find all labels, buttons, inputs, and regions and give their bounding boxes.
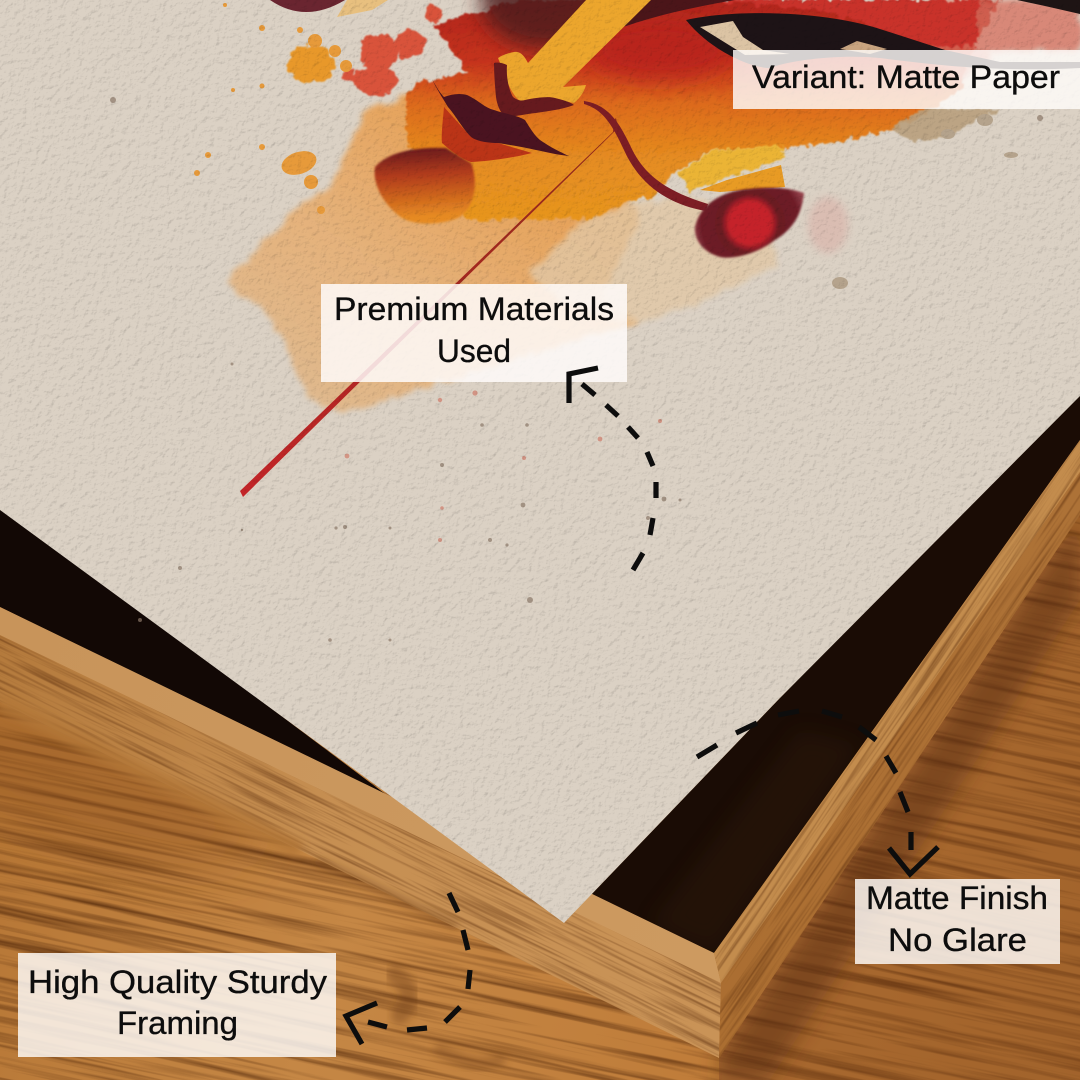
label: Matte Finish No Glare: No Glare <box>888 922 1027 958</box>
label: Premium Materials Used: Used <box>437 333 511 369</box>
label: High Quality Sturdy Framing: High Quality Sturdy <box>28 964 327 1000</box>
soft blend of frame into floor at left <box>0 702 300 850</box>
lips lower <box>442 107 532 162</box>
pink spray <box>808 197 848 253</box>
brown stain under label <box>893 108 1000 140</box>
frame top right grain <box>714 440 1080 983</box>
lips upper <box>432 79 569 156</box>
frame right side grain <box>719 472 1080 1058</box>
label: Premium Materials Used <box>321 284 627 382</box>
light beige wash patch <box>528 195 780 325</box>
paper speckles <box>110 97 1043 642</box>
watercolour artwork <box>194 0 1080 497</box>
frame top right rail <box>714 440 1080 983</box>
pale orange wash <box>225 95 640 413</box>
label: High Quality Sturdy Framing: Framing <box>117 1005 238 1041</box>
frame front left face <box>0 635 721 1058</box>
arrow: dashed curve to Matte Finish <box>697 711 938 874</box>
top right black shape <box>1017 0 1080 14</box>
maroon under fork <box>494 63 574 117</box>
top yellow wash <box>337 0 388 17</box>
top left maroon blob <box>270 0 345 12</box>
dark maroon shading <box>480 0 610 48</box>
red drop shape <box>375 148 475 224</box>
wooden frame <box>0 440 1080 1058</box>
label: Matte Finish No Glare: Matte Finish <box>866 880 1048 916</box>
eye shape <box>686 13 1080 69</box>
label: High Quality Sturdy Framing <box>18 953 336 1057</box>
pink paint flecks <box>345 390 662 542</box>
round red ornament <box>695 188 804 258</box>
dark frame interior <box>0 392 1080 953</box>
label: Premium Materials Used: Premium Materials <box>334 291 614 327</box>
frame top left rail <box>0 607 721 983</box>
left floor darkening <box>0 685 269 895</box>
red haze at right of yellow bar <box>590 20 730 80</box>
grey stain right <box>832 114 1018 289</box>
orange splat <box>287 45 335 83</box>
right floor tint <box>719 515 1080 1080</box>
main red and orange paint <box>406 0 1000 220</box>
maroon wedge beside bar <box>620 0 735 28</box>
right floor shadow <box>719 515 1080 1080</box>
small orange droplets <box>194 3 352 214</box>
yellow stripes <box>678 145 785 192</box>
red splats <box>343 5 442 95</box>
red top band at right <box>700 0 980 48</box>
interior brown reflection <box>650 730 860 953</box>
label: Variant: Matte Paper: Variant: Matte Paper <box>752 59 1060 95</box>
arrow: dashed curve to High Quality Framing <box>346 893 470 1044</box>
label: Matte Finish No Glare <box>855 879 1060 964</box>
pink red fade at right <box>930 0 1080 80</box>
frame right side face <box>719 472 1080 1058</box>
frame front left grain <box>0 635 721 1058</box>
arrow: dashed curve to Premium Materials <box>569 368 656 570</box>
curved tail <box>584 101 708 211</box>
yellow bar with forked tip <box>498 0 651 103</box>
knots and dark grain streaks on the wood <box>320 862 500 1064</box>
red thin line <box>240 118 618 497</box>
label: Variant: Matte Paper <box>733 50 1080 109</box>
